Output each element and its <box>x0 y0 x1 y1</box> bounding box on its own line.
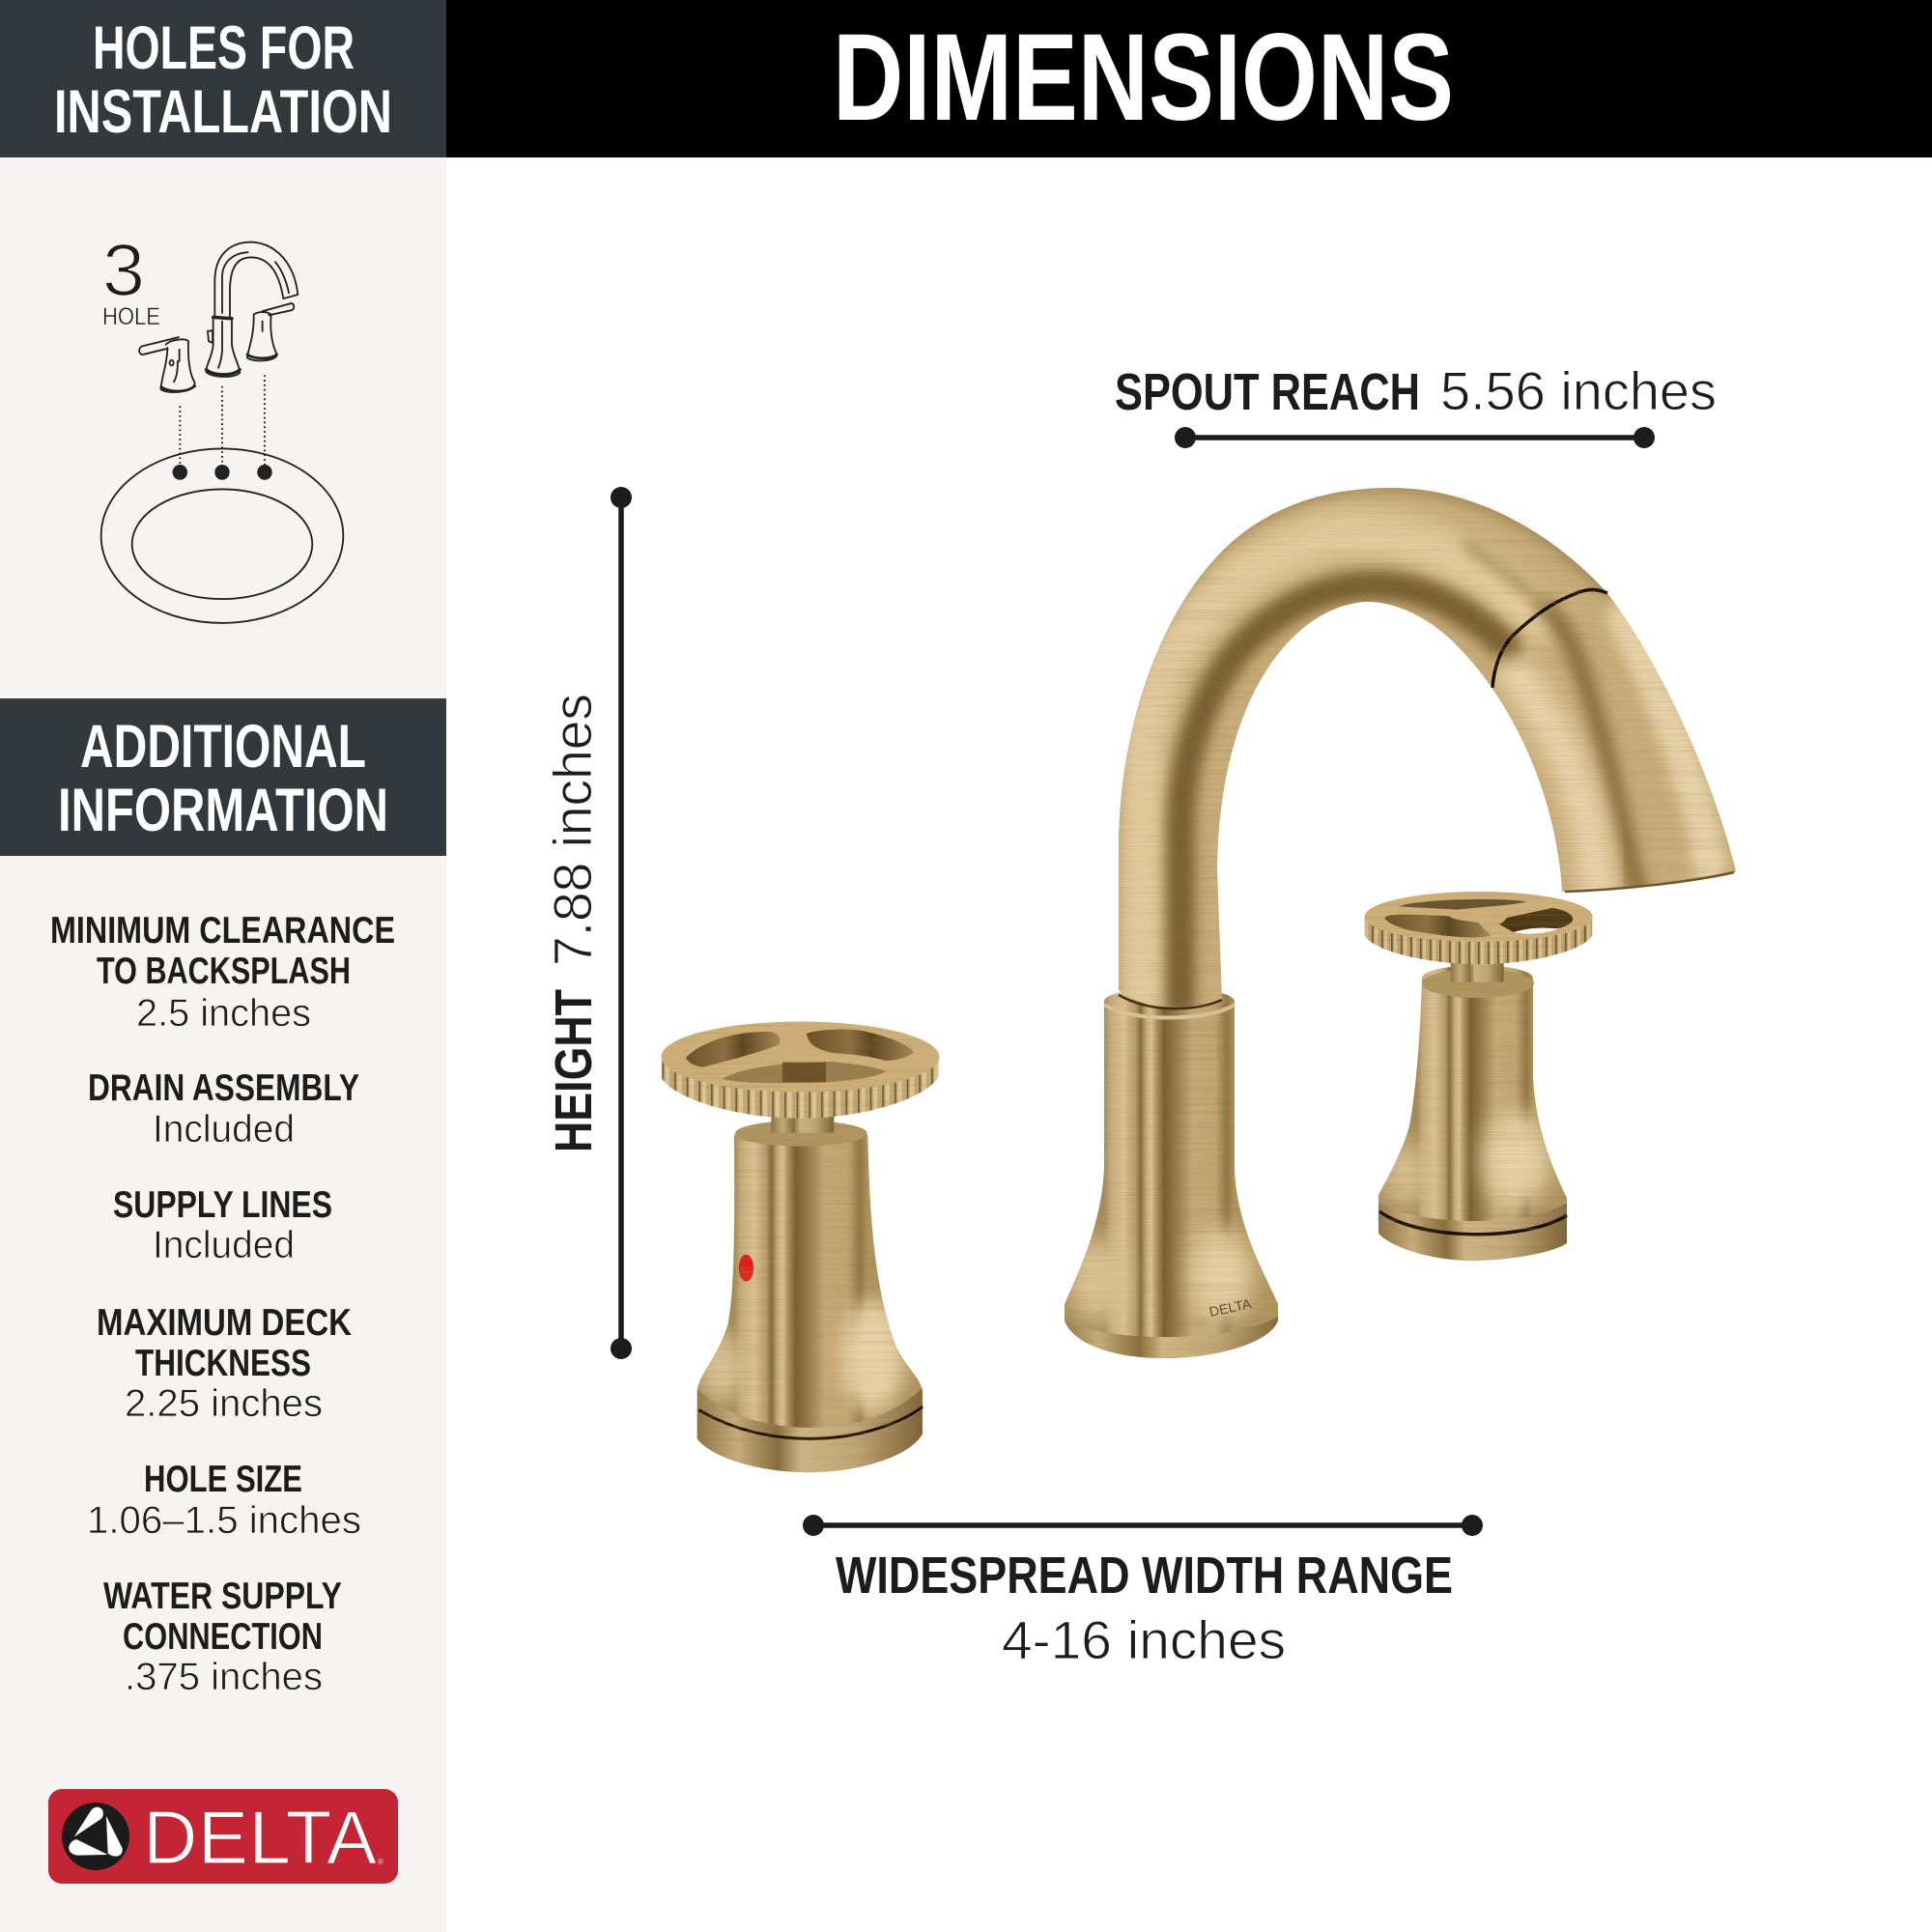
heading: holes for installation: HOLES FOR <box>93 14 355 82</box>
dimension: widespread width range <box>803 1515 1483 1670</box>
spec: drain assembly: DRAIN ASSEMBLY <box>88 1067 359 1109</box>
logo: delta <box>48 1789 398 1884</box>
dimension: height <box>542 487 632 1359</box>
left handle base plate <box>697 1406 923 1472</box>
dimension: height: 7.88 inches <box>542 694 603 966</box>
spec: water supply connection: WATER SUPPLY <box>103 1576 342 1617</box>
left wheel <box>661 1022 939 1119</box>
spec: minimum clearance: TO BACKSPLASH <box>97 951 351 992</box>
red hot indicator <box>739 1255 753 1282</box>
spec: supply lines: Included <box>153 1224 295 1266</box>
heading: additional information: INFORMATION <box>58 777 388 844</box>
title bar: dimensions: DIMENSIONS <box>833 9 1454 147</box>
heading: additional information: ADDITIONAL <box>80 713 366 781</box>
spec: drain assembly <box>88 1067 359 1151</box>
dimension: widespread width range: WIDESPREAD WIDTH RANGE <box>836 1547 1453 1605</box>
heading: additional information <box>0 698 446 856</box>
heading: holes for installation <box>0 0 446 157</box>
icon: three hole sink diagram: 3 <box>102 230 145 312</box>
faucet base: DELTA <box>1208 1295 1253 1320</box>
right wheel <box>1365 892 1593 982</box>
left handle with red hot indicator <box>661 1022 939 1472</box>
faucet base <box>1058 988 1285 1362</box>
title bar: dimensions <box>446 0 1932 157</box>
stem <box>771 1114 834 1133</box>
product: brushed gold faucet <box>661 483 1736 1472</box>
spec: supply lines <box>113 1184 332 1266</box>
spec: supply lines: SUPPLY LINES <box>113 1184 332 1226</box>
right handle base plate <box>1378 1208 1567 1261</box>
icon: three hole sink diagram: HOLE <box>102 303 160 330</box>
pull-down seam <box>1492 589 1607 688</box>
arched spout <box>1114 483 1736 1009</box>
spec: water supply connection: .375 inches <box>125 1656 323 1698</box>
spec: maximum deck thickness: THICKNESS <box>135 1343 311 1384</box>
spec: maximum deck thickness: 2.25 inches <box>125 1382 323 1425</box>
spec: minimum clearance: 2.5 inches <box>136 992 311 1035</box>
left sidebar panel <box>0 0 446 1932</box>
spec: drain assembly: Included <box>153 1108 295 1151</box>
dimension: spout reach: SPOUT REACH <box>1115 363 1420 421</box>
heading: holes for installation: INSTALLATION <box>54 78 392 146</box>
dimension: widespread width range: 4-16 inches <box>1002 1609 1286 1670</box>
spec: water supply connection: CONNECTION <box>123 1616 323 1658</box>
spec: hole size <box>87 1459 361 1542</box>
spec: minimum clearance: MINIMUM CLEARANCE <box>50 910 395 952</box>
spec: water supply connection <box>103 1576 342 1698</box>
icon: three hole sink diagram <box>101 230 343 623</box>
logo: delta: ® <box>378 1858 384 1866</box>
dimension: spout reach: 5.56 inches <box>1440 360 1717 421</box>
spec: hole size: 1.06–1.5 inches <box>87 1499 361 1542</box>
dimension: height: HEIGHT <box>545 989 603 1152</box>
spec: maximum deck thickness <box>97 1302 352 1425</box>
left handle body <box>697 1126 923 1438</box>
spec: maximum deck thickness: MAXIMUM DECK <box>97 1302 352 1344</box>
dimension: spout reach <box>1115 360 1717 448</box>
spec: minimum clearance <box>50 910 395 1035</box>
right handle <box>1365 892 1593 1261</box>
right handle body <box>1378 966 1567 1236</box>
logo: delta: DELTA <box>143 1795 377 1880</box>
spec: hole size: HOLE SIZE <box>144 1459 302 1500</box>
